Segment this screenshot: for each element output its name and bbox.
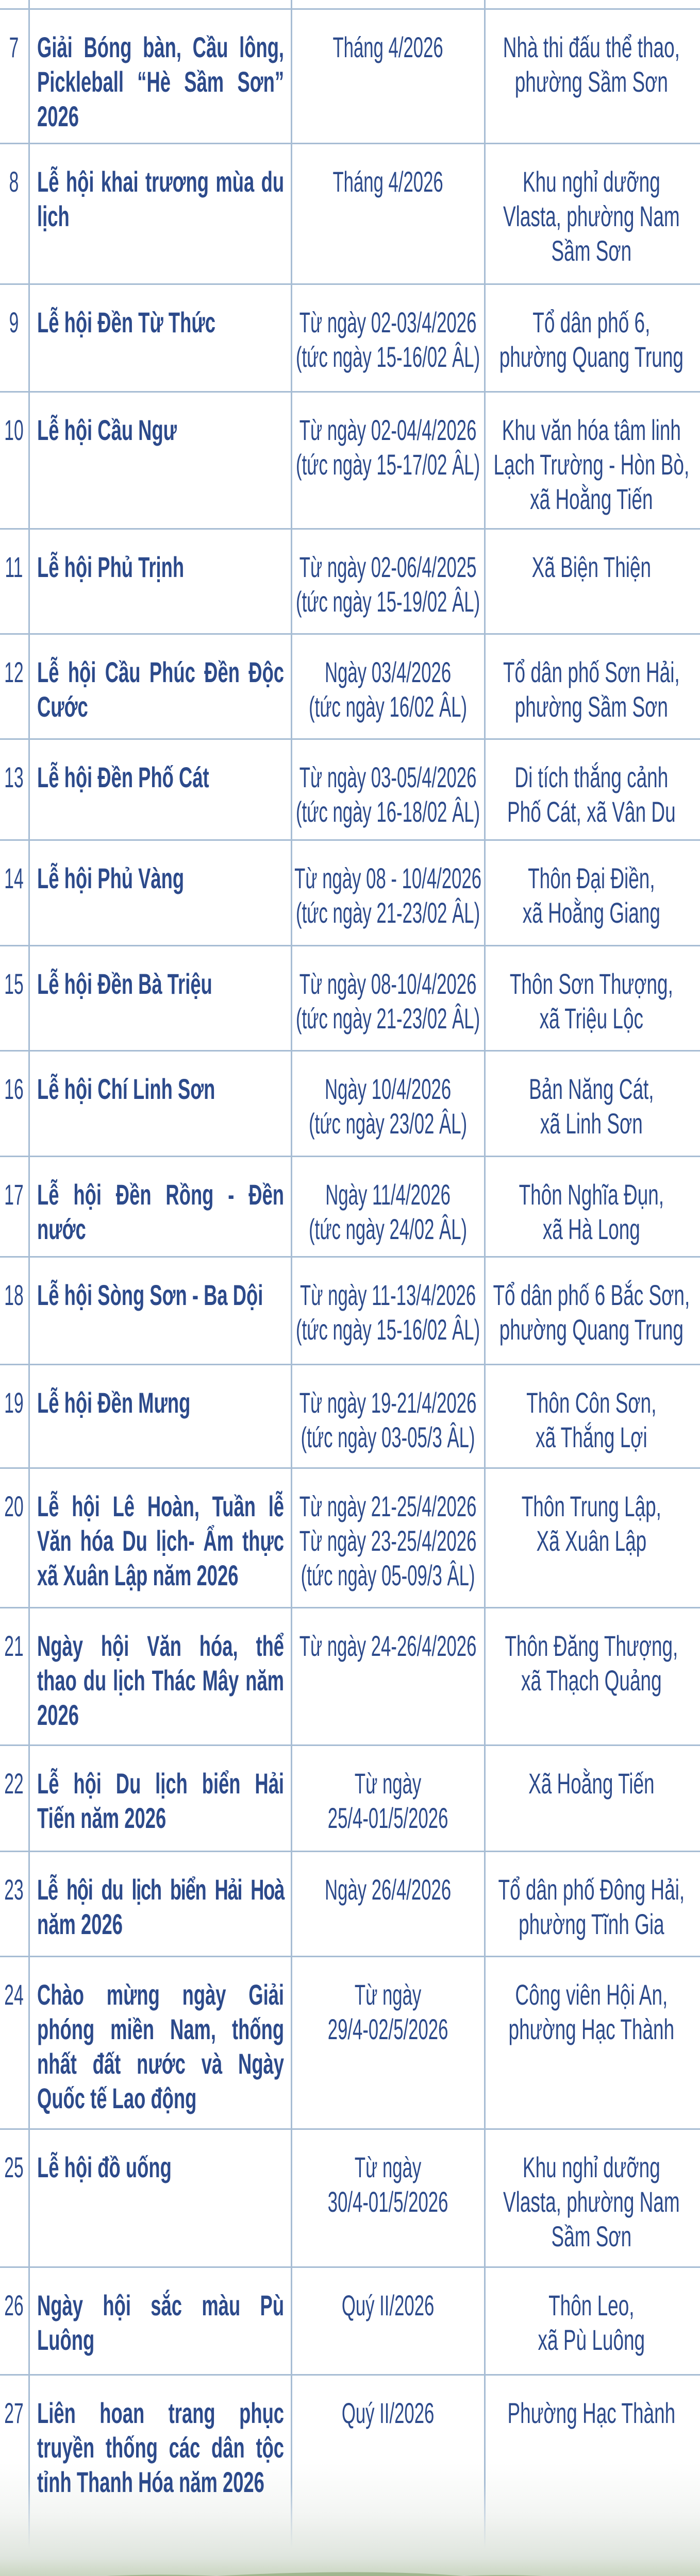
row 8: lịch bbox=[37, 200, 70, 232]
row 10: 10 bbox=[4, 414, 24, 446]
row 26: Quý II/2026 bbox=[342, 2289, 434, 2321]
row 21 bbox=[0, 1607, 700, 1744]
row 24: 29/4-02/5/2026 bbox=[328, 2013, 448, 2045]
row 21: Ngày hội Văn hóa, thể bbox=[37, 1630, 284, 1662]
row 17 bbox=[0, 1156, 700, 1256]
row 21: xã Thạch Quảng bbox=[521, 1664, 662, 1697]
row 21: thao du lịch Thác Mây năm bbox=[37, 1664, 284, 1697]
row 9: Tổ dân phố 6, bbox=[532, 306, 650, 338]
row 27: Liên hoan trang phục bbox=[37, 2397, 284, 2429]
row 20: Xã Xuân Lập bbox=[536, 1524, 646, 1557]
row 27 bbox=[0, 2374, 700, 2529]
row 20: Từ ngày 23-25/4/2026 bbox=[299, 1524, 476, 1557]
row 26 bbox=[0, 2266, 700, 2374]
row 21: Từ ngày 24-26/4/2026 bbox=[299, 1630, 476, 1662]
row 24: Từ ngày bbox=[355, 1978, 421, 2011]
row 13: Lễ hội Đền Phố Cát bbox=[37, 761, 209, 793]
row 15: Thôn Sơn Thượng, bbox=[510, 968, 673, 1000]
row 12: Lễ hội Cầu Phúc Đền Độc bbox=[37, 656, 284, 688]
row 13: Phố Cát, xã Vân Du bbox=[507, 795, 676, 828]
row 19: Từ ngày 19-21/4/2026 bbox=[299, 1386, 476, 1419]
row 19: Thôn Côn Sơn, bbox=[526, 1386, 656, 1419]
row 9: Lễ hội Đền Từ Thức bbox=[37, 306, 215, 338]
row 18: Lễ hội Sòng Sơn - Ba Dội bbox=[37, 1279, 263, 1311]
row 10 bbox=[0, 391, 700, 528]
row 10: xã Hoằng Tiến bbox=[530, 483, 653, 515]
row 15: 15 bbox=[4, 968, 24, 1000]
row 10: Lạch Trường - Hòn Bò, bbox=[493, 448, 689, 481]
row 15: Lễ hội Đền Bà Triệu bbox=[37, 968, 212, 1000]
row 11: (tức ngày 15-19/02 ÂL) bbox=[296, 585, 480, 618]
row 21: 2026 bbox=[37, 1699, 79, 1731]
row 9: 9 bbox=[9, 306, 19, 338]
row 12: (tức ngày 16/02 ÂL) bbox=[309, 690, 467, 723]
row 25: 30/4-01/5/2026 bbox=[328, 2185, 448, 2218]
row 26: 26 bbox=[4, 2289, 24, 2321]
row 14 bbox=[0, 839, 700, 945]
row 12: Ngày 03/4/2026 bbox=[325, 656, 451, 688]
row 17: Ngày 11/4/2026 bbox=[325, 1178, 451, 1211]
row 10: (tức ngày 15-17/02 ÂL) bbox=[296, 448, 480, 481]
row 25 bbox=[0, 2128, 700, 2266]
row 22: Từ ngày bbox=[355, 1767, 421, 1800]
row 14: xã Hoằng Giang bbox=[523, 896, 660, 929]
row 15: Từ ngày 08-10/4/2026 bbox=[299, 968, 476, 1000]
row 11: Lễ hội Phủ Trịnh bbox=[37, 551, 184, 583]
row 16 bbox=[0, 1050, 700, 1156]
row 7: Nhà thi đấu thể thao, bbox=[503, 31, 680, 63]
row 17: 17 bbox=[4, 1178, 24, 1211]
row 7: Giải Bóng bàn, Cầu lông, bbox=[37, 31, 284, 63]
row 23: năm 2026 bbox=[37, 1908, 123, 1940]
row 26: Ngày hội sắc màu Pù bbox=[37, 2289, 284, 2321]
row 13: 13 bbox=[4, 761, 24, 793]
row 18: phường Quang Trung bbox=[499, 1313, 684, 1346]
row 19: Lễ hội Đền Mưng bbox=[37, 1386, 190, 1419]
row 27: Phường Hạc Thành bbox=[507, 2397, 675, 2429]
row 18: Tổ dân phố 6 Bắc Sơn, bbox=[493, 1279, 690, 1311]
row 22: Xã Hoằng Tiến bbox=[528, 1767, 655, 1800]
row 13: (tức ngày 16-18/02 ÂL) bbox=[296, 795, 480, 828]
row 13: Từ ngày 03-05/4/2026 bbox=[299, 761, 476, 793]
row 18 bbox=[0, 1256, 700, 1364]
row 19: 19 bbox=[4, 1386, 24, 1419]
row 17: xã Hà Long bbox=[543, 1213, 640, 1245]
row 20: Thôn Trung Lập, bbox=[522, 1490, 661, 1522]
row 22: 22 bbox=[4, 1767, 24, 1800]
row 14: (tức ngày 21-23/02 ÂL) bbox=[296, 896, 480, 929]
row 19: (tức ngày 03-05/3 ÂL) bbox=[301, 1421, 475, 1453]
row 23: Tổ dân phố Đông Hải, bbox=[498, 1873, 685, 1906]
row 25: 25 bbox=[4, 2151, 24, 2183]
row 22: 25/4-01/5/2026 bbox=[328, 1802, 448, 1834]
row 25: Vlasta, phường Nam bbox=[503, 2185, 680, 2218]
row 11: Từ ngày 02-06/4/2025 bbox=[299, 551, 476, 583]
row 19 bbox=[0, 1364, 700, 1467]
row 26: xã Pù Luông bbox=[538, 2324, 645, 2356]
row 23: Ngày 26/4/2026 bbox=[325, 1873, 451, 1906]
row 7 bbox=[0, 8, 700, 143]
row 25: Khu nghỉ dưỡng bbox=[523, 2151, 660, 2183]
background photo: rice terraces bbox=[0, 2498, 700, 2576]
row 20: Văn hóa Du lịch- Ẩm thực bbox=[37, 1524, 284, 1557]
row 14: Lễ hội Phủ Vàng bbox=[37, 862, 184, 894]
row 26: Thôn Leo, bbox=[548, 2289, 635, 2321]
row 8: Sầm Sơn bbox=[551, 234, 631, 267]
row 16: Ngày 10/4/2026 bbox=[325, 1073, 451, 1105]
row 27: tỉnh Thanh Hóa năm 2026 bbox=[37, 2466, 264, 2498]
row 27: truyền thống các dân tộc bbox=[37, 2431, 284, 2464]
row 20: 20 bbox=[4, 1490, 24, 1522]
row 17: Thôn Nghĩa Đụn, bbox=[519, 1178, 664, 1211]
row 20 bbox=[0, 1467, 700, 1607]
row 24: Chào mừng ngày Giải bbox=[37, 1978, 284, 2011]
row 9 bbox=[0, 283, 700, 391]
row 24: phường Hạc Thành bbox=[509, 2013, 674, 2045]
row 24: phóng miền Nam, thống bbox=[37, 2013, 284, 2045]
row 12: Cước bbox=[37, 690, 88, 723]
row 9: phường Quang Trung bbox=[499, 341, 684, 373]
row 23: Lễ hội du lịch biển Hải Hoà bbox=[37, 1873, 284, 1906]
row 24: nhất đất nước và Ngày bbox=[37, 2047, 284, 2080]
row 7: phường Sầm Sơn bbox=[515, 65, 668, 98]
row 17: Lễ hội Đền Rồng - Đền bbox=[37, 1178, 284, 1211]
row 16: xã Linh Sơn bbox=[540, 1107, 643, 1140]
row 12 bbox=[0, 633, 700, 738]
row 22: Tiến năm 2026 bbox=[37, 1802, 166, 1834]
row 13 bbox=[0, 738, 700, 839]
row 25: Từ ngày bbox=[355, 2151, 421, 2183]
row 7: Tháng 4/2026 bbox=[332, 31, 443, 63]
row 24: Quốc tế Lao động bbox=[37, 2082, 196, 2114]
row 7: 2026 bbox=[37, 100, 79, 132]
row 10: Từ ngày 02-04/4/2026 bbox=[299, 414, 476, 446]
row 26: Luông bbox=[37, 2324, 94, 2356]
row 24 bbox=[0, 1956, 700, 2128]
row 8: Lễ hội khai trương mùa du bbox=[37, 165, 284, 198]
row 23: 23 bbox=[4, 1873, 24, 1906]
row 14: Từ ngày 08 - 10/4/2026 bbox=[294, 862, 481, 894]
row 8: Vlasta, phường Nam bbox=[503, 200, 680, 232]
row 16: 16 bbox=[4, 1073, 24, 1105]
row 22: Lễ hội Du lịch biển Hải bbox=[37, 1767, 284, 1800]
row 8: Tháng 4/2026 bbox=[332, 165, 443, 198]
row 8: Khu nghỉ dưỡng bbox=[523, 165, 660, 198]
row 7: 7 bbox=[9, 31, 19, 63]
row 12: Tổ dân phố Sơn Hải, bbox=[503, 656, 680, 688]
row 25: Lễ hội đồ uống bbox=[37, 2151, 172, 2183]
row 20: xã Xuân Lập năm 2026 bbox=[37, 1559, 238, 1591]
row 17: (tức ngày 24/02 ÂL) bbox=[309, 1213, 467, 1245]
row 23: phường Tĩnh Gia bbox=[519, 1908, 664, 1940]
row 20: (tức ngày 05-09/3 ÂL) bbox=[301, 1559, 475, 1591]
row 19: xã Thắng Lợi bbox=[536, 1421, 647, 1453]
row 25: Sầm Sơn bbox=[551, 2220, 631, 2252]
row 18: Từ ngày 11-13/4/2026 bbox=[300, 1279, 476, 1311]
row 11: Xã Biện Thiện bbox=[532, 551, 651, 583]
row 9: (tức ngày 15-16/02 ÂL) bbox=[296, 341, 480, 373]
row 18: 18 bbox=[4, 1279, 24, 1311]
row 11: 11 bbox=[5, 551, 23, 583]
row 15: xã Triệu Lộc bbox=[540, 1002, 643, 1035]
row 24: 24 bbox=[4, 1978, 24, 2011]
row 16: Lễ hội Chí Linh Sơn bbox=[37, 1073, 215, 1105]
row 21: Thôn Đăng Thượng, bbox=[505, 1630, 678, 1662]
row 8: 8 bbox=[9, 165, 19, 198]
row 18: (tức ngày 15-16/02 ÂL) bbox=[296, 1313, 480, 1346]
row 22 bbox=[0, 1744, 700, 1851]
row 27: Quý II/2026 bbox=[342, 2397, 434, 2429]
row 23 bbox=[0, 1851, 700, 1956]
row 20: Từ ngày 21-25/4/2026 bbox=[299, 1490, 476, 1522]
row 17: nước bbox=[37, 1213, 86, 1245]
row 15 bbox=[0, 945, 700, 1050]
row 10: Khu văn hóa tâm linh bbox=[502, 414, 681, 446]
row 20: Lễ hội Lê Hoàn, Tuần lễ bbox=[37, 1490, 284, 1522]
row 14: Thôn Đại Điền, bbox=[528, 862, 655, 894]
row 13: Di tích thắng cảnh bbox=[514, 761, 668, 793]
row 27: 27 bbox=[4, 2397, 24, 2429]
row 10: Lễ hội Cầu Ngư bbox=[37, 414, 177, 446]
row 16: (tức ngày 23/02 ÂL) bbox=[309, 1107, 467, 1140]
row 16: Bản Năng Cát, bbox=[529, 1073, 654, 1105]
row 14: 14 bbox=[4, 862, 24, 894]
row 8 bbox=[0, 143, 700, 283]
row 12: 12 bbox=[4, 656, 24, 688]
row 11 bbox=[0, 528, 700, 633]
row 9: Từ ngày 02-03/4/2026 bbox=[299, 306, 476, 338]
row 7: Pickleball “Hè Sầm Sơn” bbox=[37, 65, 284, 98]
row 12: phường Sầm Sơn bbox=[515, 690, 668, 723]
row 21: 21 bbox=[4, 1630, 24, 1662]
row 24: Công viên Hội An, bbox=[515, 1978, 668, 2011]
row 15: (tức ngày 21-23/02 ÂL) bbox=[296, 1002, 480, 1035]
